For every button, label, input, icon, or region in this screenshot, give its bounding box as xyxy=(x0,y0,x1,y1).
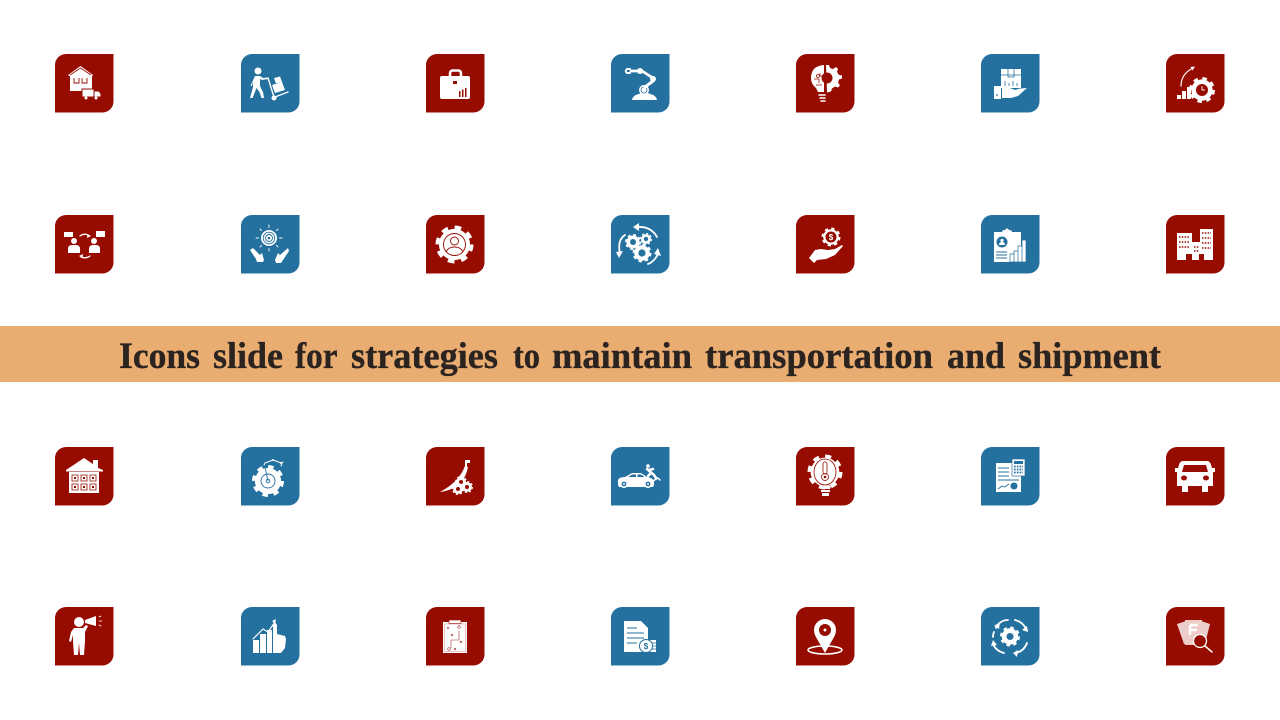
title: shipment xyxy=(1018,336,1162,377)
title: to xyxy=(513,336,540,377)
icon: clipboard profile with bars xyxy=(981,215,1040,274)
title: and xyxy=(947,336,1005,377)
icon: invoice with coins xyxy=(611,607,670,666)
icon: gears with circular arrows xyxy=(611,215,670,274)
title: slide xyxy=(213,336,283,377)
icon: house with windows xyxy=(55,447,114,506)
icon: robotic arm xyxy=(611,54,670,112)
title: for xyxy=(295,336,337,377)
title: Icons xyxy=(119,336,200,377)
icon: car front view xyxy=(1166,447,1224,506)
icon: documents with magnifying glass xyxy=(1166,607,1224,666)
icon: gear with robotic arm outline xyxy=(241,447,300,506)
icon: growth chart with clock gear xyxy=(1166,54,1224,112)
icon: person with megaphone xyxy=(55,607,114,666)
icon: clipboard game plan xyxy=(426,607,484,666)
icon: half light bulb half gear xyxy=(796,54,854,112)
icon: briefcase with growth bars xyxy=(426,54,484,112)
icon: two people exchanging messages xyxy=(55,215,114,274)
icon: gear with cycle arrows xyxy=(981,607,1040,666)
icon: worker pushing hand trolley xyxy=(241,54,300,112)
icon: gear light bulb with thermometer xyxy=(796,447,854,506)
icon: car and mechanic xyxy=(611,447,670,506)
icon: hand holding dollar gear: $ xyxy=(829,233,834,242)
icon: hand holding dollar gear xyxy=(796,215,854,274)
icon: warehouse with delivery truck xyxy=(55,54,114,112)
icon: hand holding parcel xyxy=(981,54,1040,112)
title: maintain xyxy=(552,336,692,377)
icon: rising path to flag with gears xyxy=(426,447,484,506)
icon: location pin xyxy=(796,607,854,666)
title band xyxy=(0,326,1280,382)
title: strategies xyxy=(351,336,498,377)
icon: growth chart with thumbs up xyxy=(241,607,300,666)
icon: invoice with coins: $ xyxy=(644,642,649,651)
icon: document with calculator xyxy=(981,447,1040,506)
icon: hands with target and rays xyxy=(241,215,300,274)
icon: city buildings xyxy=(1166,215,1224,274)
title: transportation xyxy=(705,336,933,377)
icon: gear with person xyxy=(426,215,484,274)
